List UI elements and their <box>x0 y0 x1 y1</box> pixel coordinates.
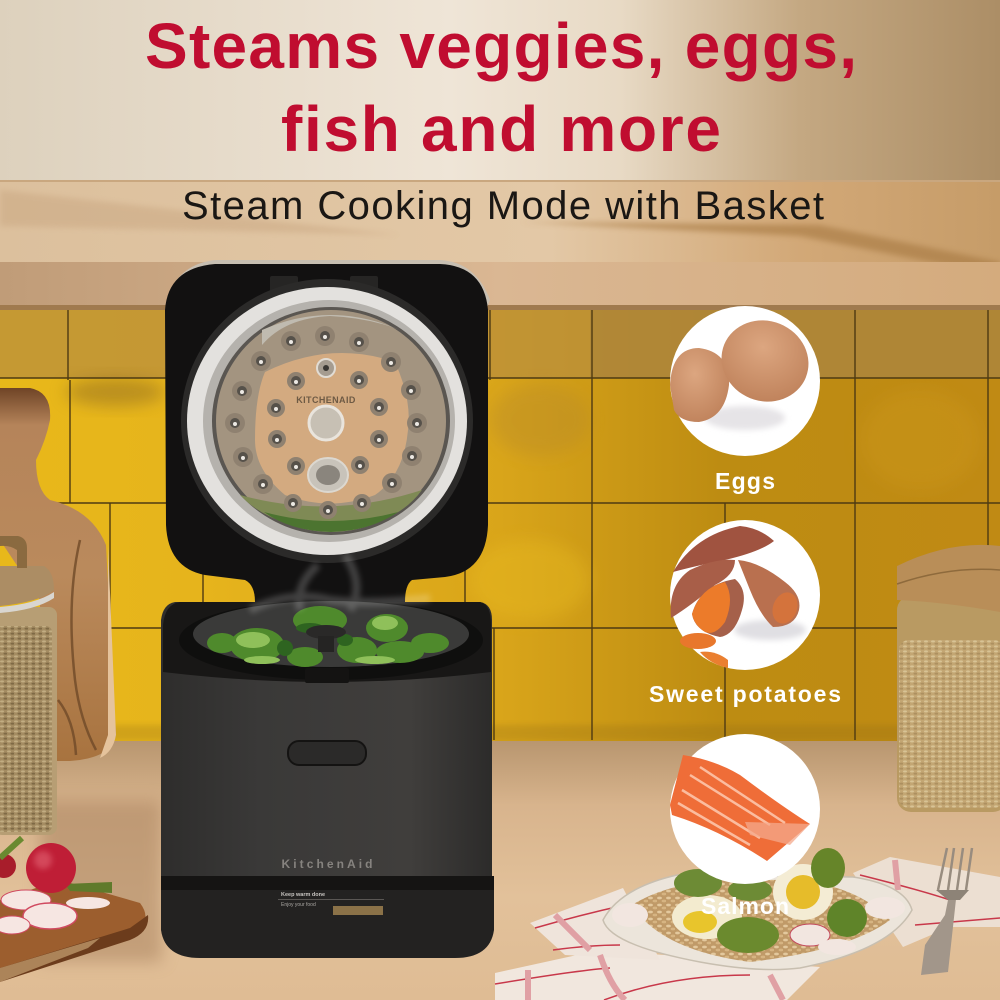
icon: eggs <box>670 306 821 456</box>
cutting board <box>0 388 116 761</box>
title <box>145 10 857 165</box>
food item: eggs <box>670 306 821 494</box>
kitchen counter <box>0 741 1000 1000</box>
rice cooker <box>161 260 494 958</box>
food item: salmon <box>670 734 820 919</box>
lid metal ring <box>181 279 473 563</box>
steam <box>250 555 430 610</box>
label: eggs: Eggs <box>715 468 775 494</box>
glass jar left <box>0 536 57 835</box>
cooker base <box>161 600 494 958</box>
title: fish and more <box>281 93 721 165</box>
kitchenaid emboss: KITCHENAID <box>296 395 356 405</box>
food item: sweet potatoes <box>649 520 841 707</box>
wooden shelf <box>0 180 1000 310</box>
plate of food <box>495 848 1000 1000</box>
subtitle: Steam Cooking Mode with Basket <box>182 184 824 228</box>
label: salmon: Salmon <box>701 893 789 919</box>
label: sweet potatoes: Sweet potatoes <box>649 681 841 707</box>
glass jar right <box>897 545 1000 812</box>
icon: salmon <box>670 734 820 884</box>
icon: sweet potatoes <box>670 520 820 670</box>
background wall <box>0 0 1000 182</box>
title: Steams veggies, eggs, <box>145 10 857 82</box>
napkin <box>495 857 1000 1000</box>
steam holes <box>225 326 427 519</box>
steam plate <box>216 310 446 532</box>
radish board <box>0 838 148 982</box>
cooker base: Enjoy your food <box>281 902 316 908</box>
cooker base: Keep warm done <box>281 892 325 898</box>
broccoli <box>207 606 449 667</box>
tiled wall <box>0 310 1000 742</box>
cooker lid <box>165 260 490 602</box>
fork <box>921 848 972 975</box>
cooker base: KitchenAid <box>282 857 372 871</box>
